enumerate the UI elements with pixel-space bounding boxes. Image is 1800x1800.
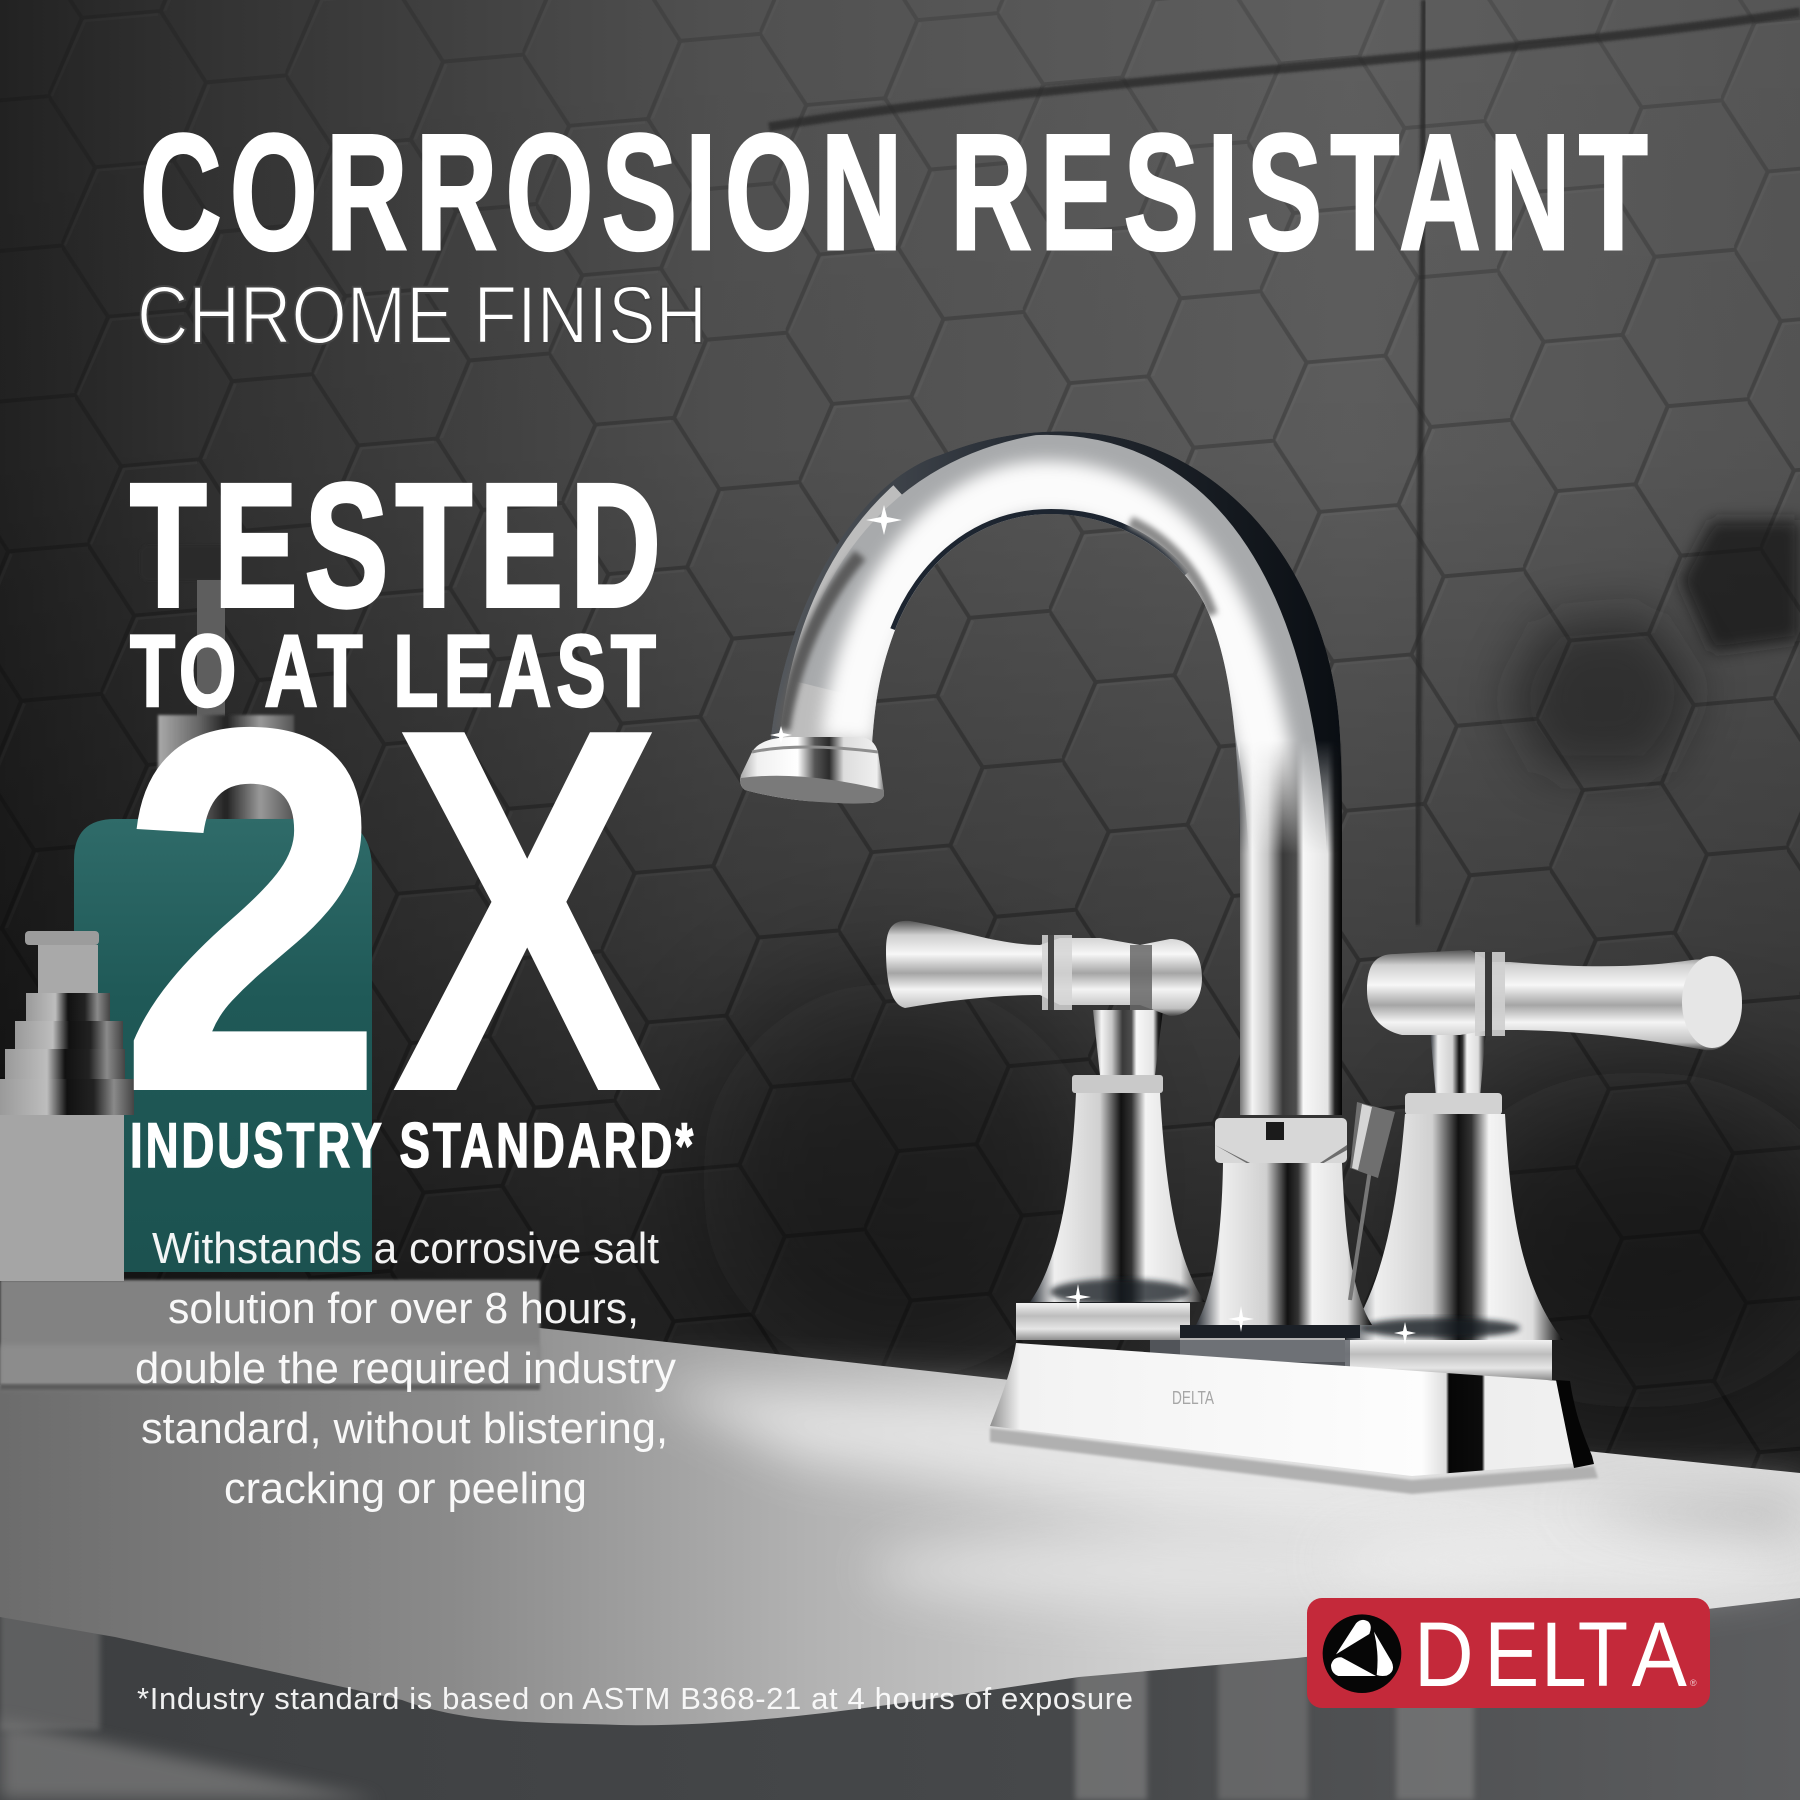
- claim: to at least: TO AT LEAST: [130, 614, 661, 728]
- body text: double the required industry: [135, 1344, 676, 1393]
- sink basin surface: [0, 1328, 1800, 1800]
- subtitle: CHROME FINISH: [137, 270, 707, 361]
- body text: Withstands a corrosive salt: [152, 1224, 659, 1273]
- tray under bottles: [0, 1280, 540, 1390]
- vertical spout column: [1240, 740, 1342, 1115]
- teal soap dispenser: [74, 545, 372, 1272]
- icon: Delta tri-drop mark: [1323, 1614, 1401, 1693]
- body text: solution for over 8 hours,: [168, 1284, 639, 1333]
- base deck plates: [1016, 1303, 1552, 1380]
- claim: 2X: [117, 620, 666, 1201]
- faucet: [740, 431, 1742, 1494]
- body text: standard, without blistering,: [141, 1404, 668, 1453]
- spout nozzle: [740, 737, 884, 803]
- small pump bottle: [0, 931, 134, 1281]
- body text: [135, 1224, 676, 1513]
- footnote: *Industry standard is based on ASTM B368-21 at 4 hours of exposure: [137, 1681, 1133, 1716]
- DELTA engraved mark: DELTA: [1172, 1388, 1214, 1408]
- lift rod: [1350, 1102, 1395, 1300]
- center collar and bell: [1196, 1118, 1372, 1325]
- base right black edge: [1556, 1380, 1594, 1468]
- left handle: [886, 921, 1205, 1305]
- wordmark: DELTA: [1414, 1603, 1688, 1706]
- faucet gasket on sink: [990, 1428, 1598, 1494]
- claim: 2X: 2: [117, 620, 386, 1201]
- spout arch: [770, 431, 1342, 890]
- specular sparkles: [770, 505, 1416, 1344]
- registered mark: ®: [1690, 1678, 1697, 1688]
- right handle: [1345, 950, 1742, 1340]
- claim: tested: TESTED: [130, 448, 668, 644]
- faucet base body: [990, 1343, 1590, 1476]
- reflection of faucet below sink: [0, 1610, 1474, 1800]
- body text: cracking or peeling: [224, 1464, 587, 1513]
- claim: 2X: X: [390, 620, 666, 1201]
- Delta logo: [1307, 1598, 1710, 1708]
- claim: industry standard: INDUSTRY STANDARD*: [130, 1111, 696, 1181]
